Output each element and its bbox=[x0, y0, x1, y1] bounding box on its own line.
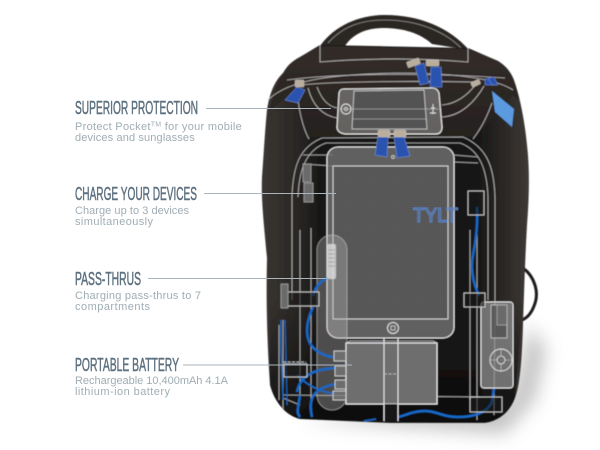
iPad device outline bbox=[327, 147, 454, 338]
heading: pass-thrus: PASS-THRUS bbox=[75, 269, 141, 289]
handle bbox=[320, 15, 469, 50]
battery pack bbox=[333, 338, 437, 422]
blue cables bbox=[281, 207, 494, 421]
description: pass-thrus: compartments bbox=[75, 301, 150, 313]
description: charge: Charge up to 3 devices bbox=[75, 205, 190, 217]
leader line bbox=[183, 364, 352, 366]
zipper pulls bbox=[285, 58, 514, 158]
TYLT logo: TYLT bbox=[413, 205, 458, 227]
seams bbox=[268, 45, 513, 420]
callout: charge your devices bbox=[75, 184, 336, 228]
callout: pass-thrus bbox=[75, 269, 330, 313]
description: battery: lithium-ion battery bbox=[75, 386, 170, 398]
backpack illustration bbox=[262, 15, 546, 434]
phone device outline bbox=[337, 88, 442, 134]
strap loops bbox=[283, 191, 502, 412]
description: protect pocket: TM bbox=[151, 122, 161, 128]
heading: superior protection: SUPERIOR PROTECTION bbox=[75, 98, 198, 118]
description: protect pocket: devices and sunglasses bbox=[75, 132, 195, 144]
description: charge: simultaneously bbox=[75, 216, 154, 228]
side strap bbox=[522, 268, 536, 320]
description: pass-thrus: Charging pass-thrus to 7 bbox=[75, 290, 201, 302]
description: protect pocket: for your mobile bbox=[161, 121, 242, 133]
iPod device outline bbox=[481, 302, 513, 388]
drop shadow bbox=[300, 325, 546, 434]
leader line bbox=[204, 192, 336, 194]
description: protect pocket: Protect Pocket bbox=[75, 121, 151, 133]
pass-thru cable tube bbox=[317, 235, 347, 410]
interior connectors bbox=[281, 164, 507, 325]
pack body bbox=[262, 45, 529, 423]
callout: portable battery bbox=[75, 355, 352, 398]
lower shading bbox=[270, 300, 523, 423]
heading: portable battery: PORTABLE BATTERY bbox=[75, 355, 179, 375]
leader line bbox=[148, 278, 330, 280]
leader line bbox=[206, 108, 331, 110]
heading: charge your devices: CHARGE YOUR DEVICES bbox=[75, 184, 197, 204]
callout: superior protection bbox=[75, 98, 331, 144]
description: battery: Rechargeable 10,400mAh 4.1A bbox=[75, 375, 229, 387]
upper panel bbox=[270, 46, 519, 137]
